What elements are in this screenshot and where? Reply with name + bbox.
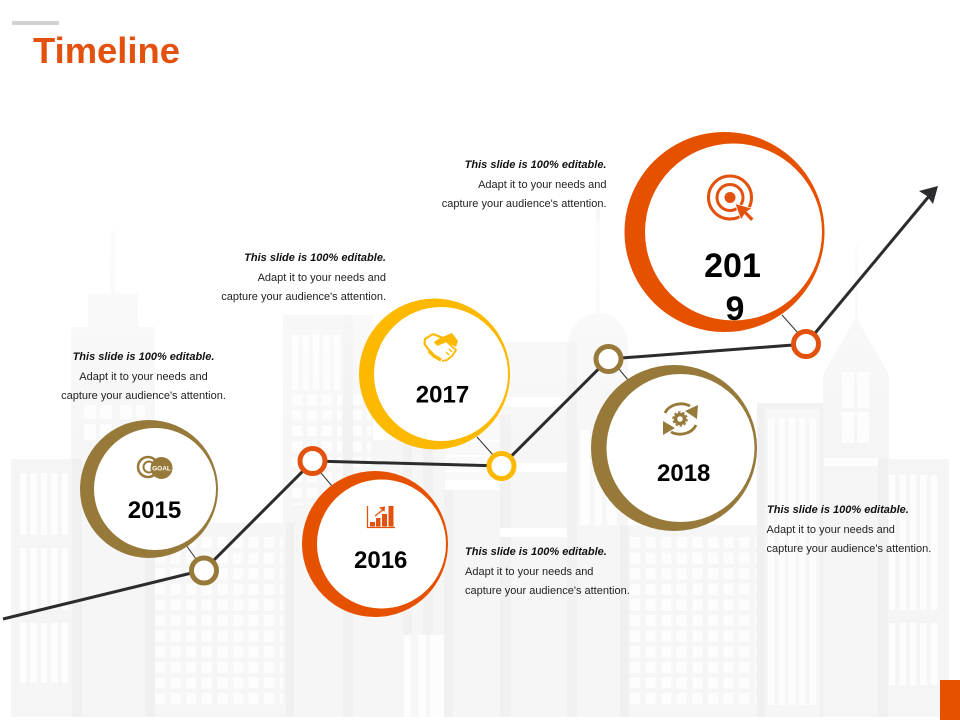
- node 2019: [794, 332, 818, 356]
- text block 2017: This slide is 100% editable.: [244, 252, 386, 264]
- icon: handshake: [424, 333, 458, 361]
- text block 2016: This slide is 100% editable.: [465, 546, 607, 558]
- disc 2017: [374, 307, 508, 441]
- icon: bar chart: [368, 506, 395, 528]
- icon: target with cursor: [708, 176, 754, 222]
- ring 2018: [591, 365, 757, 531]
- node 2018: [596, 346, 621, 372]
- rising trend line with arrow: [3, 186, 938, 619]
- corner square: [940, 680, 960, 720]
- text block 2019: This slide is 100% editable.: [465, 159, 606, 171]
- text block 2017: Adapt it to your needs and: [258, 272, 386, 284]
- node 2017: [489, 454, 514, 478]
- title: Timeline: [33, 30, 180, 71]
- year 2015: 2015: [128, 497, 181, 524]
- text block 2019: capture your audience's attention.: [442, 198, 606, 210]
- node 2016: [300, 448, 325, 474]
- ring 2016: [302, 471, 448, 617]
- milestone 2017: [359, 298, 510, 450]
- text block 2015: capture your audience's attention.: [61, 390, 226, 402]
- text block 2016: Adapt it to your needs and: [465, 566, 593, 578]
- text block 2018: This slide is 100% editable.: [767, 504, 909, 516]
- disc 2019: [645, 144, 822, 320]
- ring 2015: [80, 420, 218, 558]
- text block 2018: capture your audience's attention.: [766, 543, 931, 555]
- milestone 2018: [591, 365, 757, 531]
- text block 2018: [766, 504, 931, 555]
- text block 2019: Adapt it to your needs and: [478, 179, 606, 191]
- text block 2015: [61, 351, 226, 402]
- text block 2015: This slide is 100% editable.: [73, 351, 214, 363]
- ring 2017: [359, 298, 510, 450]
- disc 2015: [94, 428, 216, 550]
- year 2016: 2016: [354, 547, 407, 574]
- milestone 2015: [80, 420, 218, 558]
- disc 2016: [317, 480, 446, 608]
- ring 2019: [624, 132, 824, 332]
- milestone 2019: [624, 132, 824, 332]
- icon: goal target: GOAL: [152, 466, 171, 472]
- icon: gear with cycle arrows: [663, 404, 698, 435]
- text block 2016: capture your audience's attention.: [465, 585, 630, 597]
- text block 2015: Adapt it to your needs and: [79, 371, 208, 383]
- milestone 2016: [302, 471, 448, 617]
- disc 2018: [606, 374, 754, 522]
- year 2019 wrapped: 201: [704, 247, 761, 285]
- text block 2017: capture your audience's attention.: [221, 291, 386, 303]
- connector lines: [186, 315, 798, 559]
- year 2019 wrapped: 9: [726, 290, 744, 328]
- node 2015: [192, 558, 216, 583]
- text block 2018: Adapt it to your needs and: [766, 524, 895, 536]
- accent bar above title: [12, 21, 59, 25]
- text block 2019: [442, 159, 606, 210]
- year 2017: 2017: [416, 382, 469, 408]
- text block 2016: [465, 546, 630, 597]
- text block 2017: [221, 252, 386, 303]
- year 2018: 2018: [657, 460, 710, 487]
- background: city skyline: [0, 205, 960, 717]
